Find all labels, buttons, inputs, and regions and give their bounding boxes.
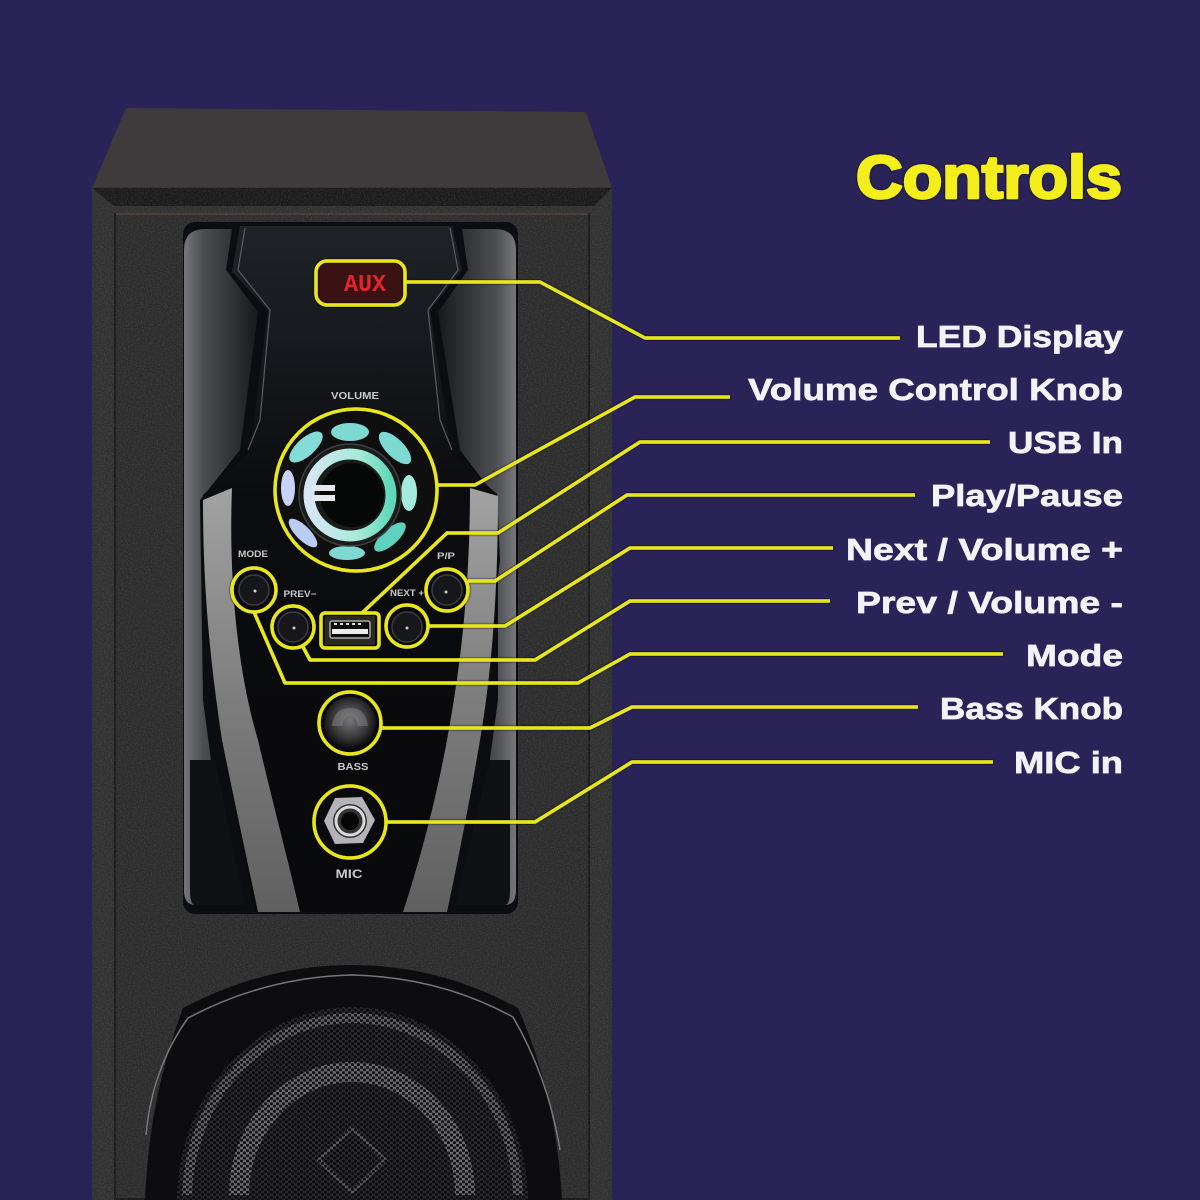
label: Play/Pause: Play/Pause xyxy=(931,478,1123,513)
printed label: play pause: P/P xyxy=(437,551,455,561)
speaker front cabinet xyxy=(92,187,612,1200)
surface grain xyxy=(92,187,612,1200)
printed label: next: NEXT + xyxy=(390,588,424,598)
label: Next / Volume +: Next / Volume + xyxy=(846,532,1123,567)
label: Bass Knob: Bass Knob xyxy=(940,691,1123,726)
title: Controls xyxy=(856,144,1122,211)
inner front face xyxy=(115,214,589,1199)
callouts xyxy=(232,261,1003,858)
printed label: volume: VOLUME xyxy=(331,390,379,402)
red AUX display: AUX xyxy=(344,272,387,299)
printed label: bass: BASS xyxy=(338,762,369,773)
callout: volume control knob xyxy=(275,397,730,571)
label: LED Display: LED Display xyxy=(916,319,1124,354)
panel base xyxy=(183,222,518,914)
bass knob xyxy=(324,697,376,749)
top lip of cabinet xyxy=(92,188,612,206)
speaker driver xyxy=(145,965,562,1200)
label: Mode: Mode xyxy=(1026,638,1123,673)
grille outer ring xyxy=(187,1018,518,1195)
central glossy area xyxy=(203,226,500,912)
divider highlight right xyxy=(428,228,458,450)
callout: bass knob xyxy=(319,692,918,754)
callout: LED display xyxy=(316,261,900,338)
upper right side sheen xyxy=(438,229,516,905)
callout: next volume plus xyxy=(386,548,833,647)
bezel highlight xyxy=(146,975,560,1150)
lower side shadow left xyxy=(190,760,245,905)
callout: play pause xyxy=(426,495,915,611)
mode button xyxy=(239,575,269,605)
previous button xyxy=(278,612,308,642)
callout: mode xyxy=(232,568,1003,683)
label: Volume Control Knob: Volume Control Knob xyxy=(748,372,1123,407)
printed label: previous: PREV− xyxy=(284,589,316,599)
silver strip right xyxy=(403,488,498,912)
label: MIC in: MIC in xyxy=(1014,745,1123,780)
callout: mic in xyxy=(314,762,993,858)
play pause button xyxy=(432,575,462,605)
label: USB In: USB In xyxy=(1008,425,1123,460)
speaker top surface xyxy=(92,108,612,188)
red AUX display xyxy=(318,262,404,304)
rust line along the top of the inner face xyxy=(116,213,588,215)
speaker tower xyxy=(92,108,612,1200)
label list xyxy=(748,319,1124,780)
upper left side sheen xyxy=(184,229,258,905)
USB port xyxy=(325,616,375,645)
label: Prev / Volume -: Prev / Volume - xyxy=(856,585,1123,620)
mic jack xyxy=(324,797,375,844)
driver bezel xyxy=(145,965,562,1200)
callout: prev volume minus xyxy=(272,601,830,660)
volume knob with LEDs xyxy=(275,410,435,570)
divider highlight left xyxy=(238,228,270,450)
printed label: mode: MODE xyxy=(238,549,268,559)
lower side shadow right xyxy=(455,760,510,905)
next button xyxy=(392,612,422,642)
grille logo xyxy=(319,1128,385,1192)
callout: USB in xyxy=(321,442,990,648)
printed label: mic: MIC xyxy=(336,867,363,881)
grille inner ring xyxy=(239,1072,465,1195)
control panel xyxy=(183,222,518,914)
metal grille xyxy=(177,1007,528,1200)
silver strip left xyxy=(203,488,300,912)
